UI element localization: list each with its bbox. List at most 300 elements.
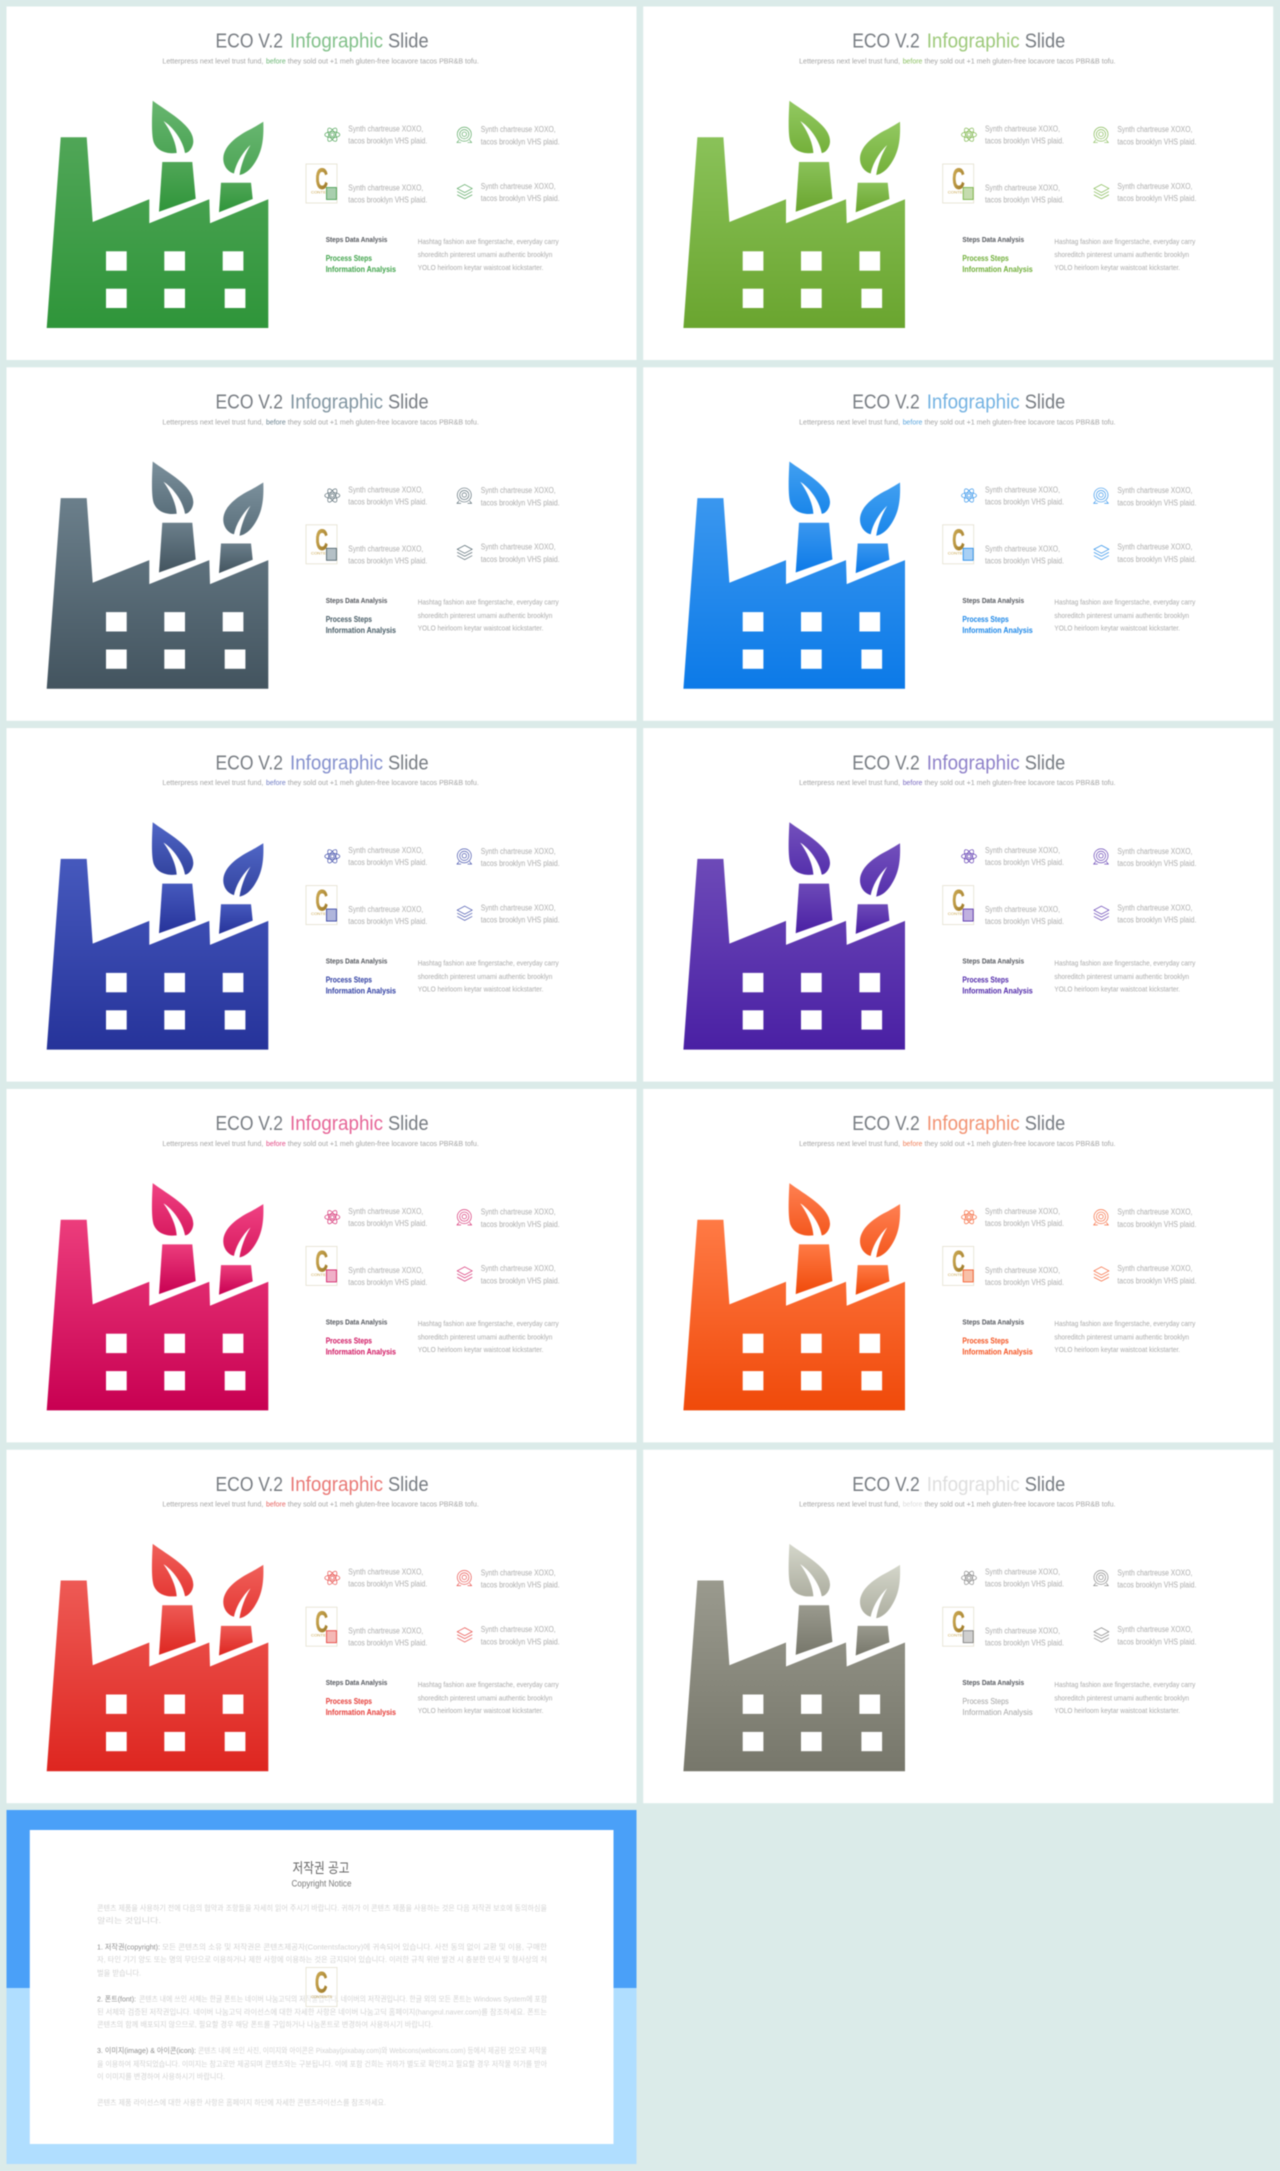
- intro paragraph: 알리는 것입니다.: [97, 1915, 161, 1925]
- feature text 4: [1117, 182, 1196, 203]
- steps labels: Process Steps: [326, 1697, 373, 1706]
- title: ECO V.2: [852, 391, 920, 413]
- subtitle: [799, 1500, 1116, 1509]
- feature text 3: Synth chartreuse XOXO,: [985, 905, 1060, 914]
- feature text 4: tacos brooklyn VHS plaid.: [481, 1637, 560, 1646]
- description: shoreditch pinterest umami authentic brooklyn: [1054, 250, 1189, 259]
- title: Infographic: [927, 1113, 1020, 1135]
- steps labels: Information Analysis: [962, 1708, 1033, 1717]
- description: [1054, 237, 1196, 272]
- title: [216, 31, 429, 53]
- watermark logo: C: [952, 524, 965, 557]
- feature text 3: [985, 905, 1064, 926]
- title: [216, 1474, 429, 1496]
- notice heading: Copyright Notice: [292, 1878, 352, 1888]
- feature text 3: tacos brooklyn VHS plaid.: [985, 556, 1064, 565]
- feature text 2: Synth chartreuse XOXO,: [1117, 125, 1192, 134]
- factory illustration: [683, 462, 905, 689]
- description: YOLO heirloom keytar waistcoat kickstarter.: [418, 624, 543, 633]
- title: Slide: [1025, 1474, 1065, 1496]
- feature text 2: [1117, 1208, 1196, 1229]
- feature text 1: tacos brooklyn VHS plaid.: [985, 497, 1064, 506]
- watermark logo: CONTE: [948, 911, 963, 916]
- subtitle: [162, 56, 479, 66]
- feature text 2: [481, 486, 560, 507]
- paragraph 2: font: 콘텐츠의 함께 배포되지 않으므로, 필요할 경우 해당 폰트를 구입하거나 나눔폰트로 변경하여 사용하시기 바랍니다.: [97, 2019, 433, 2029]
- description: YOLO heirloom keytar waistcoat kickstarter.: [418, 1706, 543, 1715]
- feature text 1: [985, 846, 1064, 867]
- description: shoreditch pinterest umami authentic brooklyn: [418, 972, 552, 981]
- subtitle: Letterpress next level trust fund,: [799, 1500, 900, 1509]
- title: Infographic: [927, 1474, 1020, 1496]
- watermark logo: [306, 1245, 337, 1285]
- watermark logo: C: [316, 1245, 328, 1278]
- steps labels: Process Steps: [962, 1336, 1009, 1345]
- watermark logo: C: [316, 163, 328, 196]
- watermark logo: C: [952, 163, 965, 196]
- steps labels: Process Steps: [962, 1697, 1009, 1706]
- steps labels: Process Steps: [326, 976, 373, 985]
- paragraph 1: copyright: 모든 콘텐츠의 소유 및 저작권은 콘텐츠제공자(Contentsfactory)에 귀속되어 있습니다. 사전 동의 없이 교환 및 이용, 구매한: [162, 1941, 547, 1951]
- steps labels: Process Steps: [326, 254, 373, 263]
- feature text 4: [1117, 1264, 1196, 1286]
- subtitle: they sold out +1 meh gluten-free locavore tacos PBR&B tofu.: [924, 417, 1116, 426]
- subtitle: Letterpress next level trust fund,: [162, 417, 263, 426]
- feature text 2: Synth chartreuse XOXO,: [481, 125, 556, 134]
- feature text 2: [481, 125, 560, 146]
- panel: gray slide: [643, 1450, 1273, 1803]
- paragraph 3: image and icon: 을 이용하여 제작되었습니다. 이미지는 참고로만 제공되며 콘텐츠와는 구분됩니다. 이에 포함 건희는 귀하가 별도로 확인하고 필요할 경우 저작물 허가를 받아: [97, 2058, 547, 2068]
- icon: target: [457, 488, 472, 503]
- description: shoreditch pinterest umami authentic brooklyn: [1054, 1333, 1189, 1342]
- title: [852, 1474, 1065, 1496]
- icon: target: [1094, 488, 1108, 503]
- feature text 1: [348, 485, 427, 506]
- panel: pink slide: [6, 1089, 636, 1442]
- feature text 1: [985, 1568, 1064, 1589]
- feature text 3: Synth chartreuse XOXO,: [985, 1266, 1060, 1275]
- icon: atom: [962, 848, 976, 864]
- description: shoreditch pinterest umami authentic brooklyn: [418, 1333, 552, 1342]
- subtitle: Letterpress next level trust fund,: [799, 56, 900, 66]
- title: Slide: [388, 31, 429, 53]
- feature text 2: [1117, 125, 1196, 146]
- feature text 4: [1117, 1625, 1196, 1646]
- description: Hashtag fashion axe fingerstache, everyday carry: [1054, 237, 1196, 246]
- title: Slide: [388, 1113, 429, 1135]
- steps labels: Steps Data Analysis: [326, 1317, 387, 1326]
- steps labels: Steps Data Analysis: [326, 957, 387, 966]
- steps labels: Information Analysis: [326, 626, 397, 635]
- subtitle: [162, 1139, 479, 1148]
- steps labels: [326, 957, 397, 996]
- watermark logo: [306, 163, 337, 203]
- paragraph 1: copyright: [97, 1941, 547, 1977]
- title: ECO V.2: [216, 752, 283, 774]
- watermark logo: [943, 1606, 974, 1646]
- feature text 2: tacos brooklyn VHS plaid.: [481, 1220, 560, 1229]
- description: Hashtag fashion axe fingerstache, everyday carry: [418, 598, 559, 607]
- description: [1054, 1680, 1196, 1715]
- notice heading: 저작권 공고: [292, 1860, 350, 1876]
- title: [852, 31, 1065, 53]
- factory illustration: [683, 822, 905, 1050]
- feature text 3: Synth chartreuse XOXO,: [348, 1266, 423, 1275]
- icon: target: [457, 1210, 472, 1225]
- description: Hashtag fashion axe fingerstache, everyday carry: [1054, 1319, 1196, 1328]
- watermark logo: [943, 1245, 974, 1285]
- description: YOLO heirloom keytar waistcoat kickstarter.: [418, 1345, 543, 1354]
- feature text 3: [348, 1627, 427, 1648]
- feature text 4: Synth chartreuse XOXO,: [481, 1625, 556, 1634]
- title: [852, 392, 1065, 414]
- subtitle: they sold out +1 meh gluten-free locavore tacos PBR&B tofu.: [288, 417, 479, 426]
- title: [852, 752, 1065, 774]
- intro paragraph: 콘텐츠 제품을 사용하기 전에 다음의 협약과 조항들을 자세히 읽어 주시기 바랍니다. 귀하가 이 콘텐츠 제품을 사용하는 것은 다음 저작권 보호에 동의하심을: [97, 1902, 547, 1912]
- steps labels: Steps Data Analysis: [962, 596, 1024, 605]
- watermark logo: [943, 524, 974, 564]
- icon: target: [457, 1570, 472, 1586]
- watermark logo: CONTENTS: [311, 1994, 332, 1999]
- factory illustration: [47, 1544, 268, 1771]
- white notice card: [30, 1830, 614, 2144]
- factory illustration: [683, 101, 905, 328]
- subtitle: [799, 778, 1116, 787]
- icon: layers: [457, 184, 472, 199]
- feature text 3: Synth chartreuse XOXO,: [985, 544, 1060, 553]
- watermark logo: C: [952, 885, 965, 918]
- steps labels: Steps Data Analysis: [962, 1317, 1024, 1326]
- watermark logo: C: [952, 1606, 965, 1639]
- feature text 4: tacos brooklyn VHS plaid.: [481, 194, 560, 203]
- feature text 1: [985, 1207, 1064, 1228]
- steps labels: Steps Data Analysis: [962, 957, 1024, 966]
- subtitle: before: [903, 778, 922, 787]
- title: ECO V.2: [216, 1474, 283, 1496]
- feature text 3: [348, 905, 427, 926]
- feature text 3: Synth chartreuse XOXO,: [348, 1627, 423, 1636]
- panel: copyright notice: [6, 1810, 636, 2164]
- feature text 4: Synth chartreuse XOXO,: [1117, 903, 1192, 912]
- subtitle: they sold out +1 meh gluten-free locavore tacos PBR&B tofu.: [288, 1139, 479, 1148]
- watermark logo: [306, 1966, 337, 2006]
- feature text 2: Synth chartreuse XOXO,: [481, 486, 556, 495]
- feature text 1: Synth chartreuse XOXO,: [985, 1568, 1060, 1577]
- feature text 2: tacos brooklyn VHS plaid.: [481, 138, 560, 146]
- feature text 1: tacos brooklyn VHS plaid.: [348, 136, 427, 146]
- panel: red slide: [6, 1450, 636, 1803]
- icon: layers: [1094, 906, 1109, 920]
- steps labels: Information Analysis: [326, 265, 397, 274]
- subtitle: they sold out +1 meh gluten-free locavore tacos PBR&B tofu.: [288, 56, 479, 66]
- steps labels: Information Analysis: [962, 265, 1033, 274]
- title: [852, 1113, 1065, 1135]
- feature text 1: Synth chartreuse XOXO,: [348, 1207, 423, 1216]
- icon: layers: [457, 545, 472, 560]
- feature text 1: Synth chartreuse XOXO,: [348, 846, 423, 855]
- subtitle: before: [903, 417, 922, 426]
- icon: target: [457, 849, 472, 864]
- factory illustration: [47, 822, 268, 1050]
- subtitle: before: [903, 56, 922, 66]
- subtitle: before: [266, 417, 286, 426]
- feature text 1: tacos brooklyn VHS plaid.: [985, 1219, 1064, 1228]
- factory illustration: [683, 1544, 905, 1771]
- feature text 2: tacos brooklyn VHS plaid.: [1117, 1581, 1196, 1590]
- feature text 4: tacos brooklyn VHS plaid.: [1117, 916, 1196, 925]
- watermark logo: C: [316, 524, 328, 557]
- title: ECO V.2: [216, 391, 283, 413]
- blue backdrop, upper half: [6, 1810, 636, 1988]
- title: ECO V.2: [852, 31, 920, 53]
- feature text 4: tacos brooklyn VHS plaid.: [481, 1277, 560, 1286]
- panel: indigo slide: [6, 728, 636, 1082]
- watermark logo: C: [952, 1245, 965, 1278]
- steps labels: Information Analysis: [326, 987, 397, 996]
- feature text 3: Synth chartreuse XOXO,: [985, 1627, 1060, 1636]
- steps labels: [326, 1317, 397, 1356]
- feature text 3: tacos brooklyn VHS plaid.: [348, 1278, 427, 1287]
- feature text 4: tacos brooklyn VHS plaid.: [481, 555, 560, 564]
- closing line: 콘텐츠 제품 라이선스에 대한 사용한 사항은 홈페이지 하단에 자세한 콘텐츠라이선스를 참조하세요.: [97, 2097, 386, 2107]
- feature text 3: [985, 1266, 1064, 1287]
- feature text 1: Synth chartreuse XOXO,: [985, 124, 1060, 134]
- watermark logo: [943, 885, 974, 925]
- steps labels: [326, 596, 397, 635]
- description: [418, 598, 559, 633]
- feature text 1: [348, 124, 427, 146]
- paragraph 3: image and icon: [97, 2045, 547, 2081]
- description: [418, 958, 559, 993]
- watermark logo: C: [315, 1966, 328, 2000]
- feature text 2: Synth chartreuse XOXO,: [481, 1568, 556, 1577]
- feature text 1: Synth chartreuse XOXO,: [348, 124, 423, 134]
- feature text 2: tacos brooklyn VHS plaid.: [1117, 138, 1196, 146]
- feature text 3: [985, 1627, 1064, 1648]
- description: [1054, 598, 1196, 633]
- watermark logo: C: [316, 1606, 328, 1639]
- feature text 2: [481, 1568, 560, 1590]
- title: Infographic: [290, 752, 383, 774]
- steps labels: [326, 235, 397, 274]
- steps labels: [962, 235, 1033, 274]
- subtitle: before: [903, 1139, 922, 1148]
- steps labels: Information Analysis: [962, 987, 1033, 996]
- feature text 2: Synth chartreuse XOXO,: [1117, 1568, 1192, 1577]
- icon: layers: [457, 906, 472, 920]
- description: shoreditch pinterest umami authentic brooklyn: [418, 611, 552, 620]
- subtitle: [162, 1500, 479, 1509]
- paragraph 1: copyright: 벌을 받습니다.: [97, 1967, 141, 1977]
- feature text 4: tacos brooklyn VHS plaid.: [481, 916, 560, 925]
- feature text 2: Synth chartreuse XOXO,: [481, 1208, 556, 1217]
- title: ECO V.2: [852, 1474, 920, 1496]
- feature text 4: Synth chartreuse XOXO,: [481, 1264, 556, 1273]
- title: Infographic: [927, 391, 1020, 413]
- watermark logo: [943, 163, 974, 203]
- description: shoreditch pinterest umami authentic brooklyn: [418, 1693, 552, 1702]
- title: Slide: [388, 391, 429, 413]
- feature text 2: Synth chartreuse XOXO,: [481, 847, 556, 856]
- title: Infographic: [290, 391, 383, 413]
- feature text 1: [985, 485, 1064, 506]
- feature text 1: tacos brooklyn VHS plaid.: [348, 858, 427, 867]
- description: YOLO heirloom keytar waistcoat kickstarter.: [1054, 984, 1180, 993]
- icon: atom: [962, 1570, 976, 1586]
- paragraph 3: image and icon: 이 이미지를 변경하여 사용하시기 바랍니다.: [97, 2071, 225, 2081]
- title: ECO V.2: [216, 1113, 283, 1135]
- feature text 2: tacos brooklyn VHS plaid.: [481, 498, 560, 507]
- subtitle: [799, 1139, 1116, 1148]
- feature text 2: tacos brooklyn VHS plaid.: [1117, 1220, 1196, 1229]
- icon: atom: [325, 127, 340, 143]
- subtitle: before: [903, 1500, 922, 1509]
- title: Slide: [388, 752, 429, 774]
- icon: atom: [962, 1209, 976, 1225]
- title: Infographic: [927, 752, 1020, 774]
- icon: atom: [325, 1209, 340, 1225]
- feature text 4: Synth chartreuse XOXO,: [1117, 1264, 1192, 1273]
- feature text 3: tacos brooklyn VHS plaid.: [985, 1278, 1064, 1287]
- title: Slide: [1025, 31, 1065, 53]
- feature text 3: tacos brooklyn VHS plaid.: [348, 917, 427, 926]
- panel: orange slide: [643, 1089, 1273, 1442]
- subtitle: before: [266, 778, 286, 787]
- feature text 4: tacos brooklyn VHS plaid.: [1117, 1277, 1196, 1286]
- feature text 1: Synth chartreuse XOXO,: [985, 1207, 1060, 1216]
- description: YOLO heirloom keytar waistcoat kickstarter.: [418, 984, 543, 993]
- icon: target: [1094, 849, 1108, 864]
- watermark logo: CONTE: [311, 1633, 326, 1638]
- steps labels: Information Analysis: [326, 1347, 397, 1356]
- feature text 1: tacos brooklyn VHS plaid.: [985, 136, 1064, 146]
- steps labels: Information Analysis: [962, 1347, 1033, 1356]
- feature text 4: tacos brooklyn VHS plaid.: [1117, 194, 1196, 203]
- subtitle: they sold out +1 meh gluten-free locavore tacos PBR&B tofu.: [288, 1500, 479, 1509]
- subtitle: they sold out +1 meh gluten-free locavore tacos PBR&B tofu.: [924, 778, 1116, 787]
- feature text 3: tacos brooklyn VHS plaid.: [985, 917, 1064, 926]
- watermark logo: CONTE: [948, 190, 963, 194]
- panel: green slide: [6, 6, 636, 360]
- paragraph 2: font: 콘텐츠 내에 쓰인 서체는 한글 폰트는 네이버 나눔고딕의 저작물입니다. 네이버의 저작권입니다. 한글 외의 모든 폰트는 Windows System에 포함: [139, 1993, 547, 2003]
- steps labels: Steps Data Analysis: [962, 235, 1024, 244]
- icon: layers: [1094, 1628, 1109, 1642]
- feature text 4: Synth chartreuse XOXO,: [1117, 182, 1192, 191]
- subtitle: [162, 778, 479, 787]
- icon: atom: [325, 1570, 340, 1586]
- icon: atom: [962, 488, 976, 503]
- description: YOLO heirloom keytar waistcoat kickstarter.: [1054, 1706, 1180, 1715]
- steps labels: Steps Data Analysis: [962, 1678, 1024, 1687]
- feature text 3: Synth chartreuse XOXO,: [348, 905, 423, 914]
- steps labels: Information Analysis: [962, 626, 1033, 635]
- subtitle: Letterpress next level trust fund,: [162, 778, 263, 787]
- feature text 3: [985, 184, 1064, 204]
- panel: blue slide: [643, 367, 1273, 721]
- icon: target: [1094, 1210, 1108, 1225]
- steps labels: Steps Data Analysis: [326, 1678, 387, 1687]
- feature text 2: tacos brooklyn VHS plaid.: [481, 1581, 560, 1590]
- title: Infographic: [290, 1474, 383, 1496]
- title: Slide: [1025, 1113, 1065, 1135]
- feature text 4: [1117, 543, 1196, 564]
- steps labels: [962, 957, 1033, 996]
- subtitle: before: [266, 1500, 286, 1509]
- subtitle: they sold out +1 meh gluten-free locavore tacos PBR&B tofu.: [288, 778, 479, 787]
- title: ECO V.2: [852, 1113, 920, 1135]
- description: [1054, 1319, 1196, 1354]
- icon: atom: [325, 488, 340, 503]
- feature text 2: [1117, 1568, 1196, 1590]
- feature text 4: [481, 543, 560, 564]
- feature text 4: Synth chartreuse XOXO,: [481, 182, 556, 191]
- feature text 4: tacos brooklyn VHS plaid.: [1117, 1637, 1196, 1646]
- feature text 1: tacos brooklyn VHS plaid.: [985, 858, 1064, 867]
- description: shoreditch pinterest umami authentic brooklyn: [418, 250, 552, 259]
- subtitle: before: [266, 56, 286, 66]
- description: Hashtag fashion axe fingerstache, everyday carry: [1054, 1680, 1196, 1689]
- feature text 3: Synth chartreuse XOXO,: [985, 184, 1060, 192]
- feature text 1: Synth chartreuse XOXO,: [985, 846, 1060, 855]
- steps labels: [326, 1678, 397, 1717]
- title: [216, 392, 429, 414]
- icon: layers: [1094, 545, 1109, 560]
- title: [216, 1113, 429, 1135]
- feature text 1: [348, 846, 427, 867]
- watermark logo: C: [316, 885, 328, 918]
- notice heading: [292, 1860, 352, 1888]
- subtitle: they sold out +1 meh gluten-free locavore tacos PBR&B tofu.: [924, 1500, 1116, 1509]
- feature text 4: [481, 903, 560, 925]
- feature text 2: [1117, 847, 1196, 868]
- feature text 4: [481, 182, 560, 203]
- subtitle: Letterpress next level trust fund,: [799, 1139, 900, 1148]
- steps labels: [962, 596, 1033, 635]
- feature text 4: Synth chartreuse XOXO,: [1117, 1625, 1192, 1634]
- description: [418, 237, 559, 272]
- icon: layers: [457, 1628, 472, 1642]
- factory illustration: [683, 1183, 905, 1410]
- feature text 1: [985, 124, 1064, 146]
- feature text 3: Synth chartreuse XOXO,: [348, 544, 423, 553]
- watermark logo: CONTE: [948, 1272, 963, 1277]
- steps labels: Process Steps: [962, 976, 1009, 985]
- description: [1054, 958, 1196, 993]
- feature text 1: tacos brooklyn VHS plaid.: [348, 1219, 427, 1228]
- watermark logo: CONTE: [311, 1272, 326, 1277]
- feature text 3: tacos brooklyn VHS plaid.: [348, 1639, 427, 1648]
- feature text 3: tacos brooklyn VHS plaid.: [348, 196, 427, 204]
- paragraph 3: image and icon: 콘텐츠 내에 쓰인 사진, 이미지와 아이콘은 Pixabay(pixabay.com)와 Webicons(webicons.com) 등에서 제공된 것으로 저작물: [198, 2045, 547, 2055]
- panel: purple slide: [643, 728, 1273, 1082]
- paragraph 2: font: 2. 폰트(font):: [97, 1994, 136, 2003]
- feature text 3: tacos brooklyn VHS plaid.: [985, 196, 1064, 204]
- feature text 4: tacos brooklyn VHS plaid.: [1117, 555, 1196, 564]
- feature text 4: Synth chartreuse XOXO,: [481, 903, 556, 912]
- subtitle: before: [266, 1139, 286, 1148]
- feature text 3: [985, 544, 1064, 565]
- feature text 1: Synth chartreuse XOXO,: [348, 1568, 423, 1577]
- watermark logo: CONTE: [948, 550, 963, 555]
- feature text 1: tacos brooklyn VHS plaid.: [348, 497, 427, 506]
- steps labels: Process Steps: [326, 615, 373, 624]
- subtitle: [162, 417, 479, 426]
- feature text 1: [348, 1568, 427, 1589]
- description: Hashtag fashion axe fingerstache, everyday carry: [1054, 598, 1196, 607]
- feature text 1: Synth chartreuse XOXO,: [348, 485, 423, 494]
- feature text 4: [1117, 903, 1196, 925]
- paragraph 3: image and icon: 3. 이미지(image) & 아이콘(icon):: [97, 2045, 196, 2055]
